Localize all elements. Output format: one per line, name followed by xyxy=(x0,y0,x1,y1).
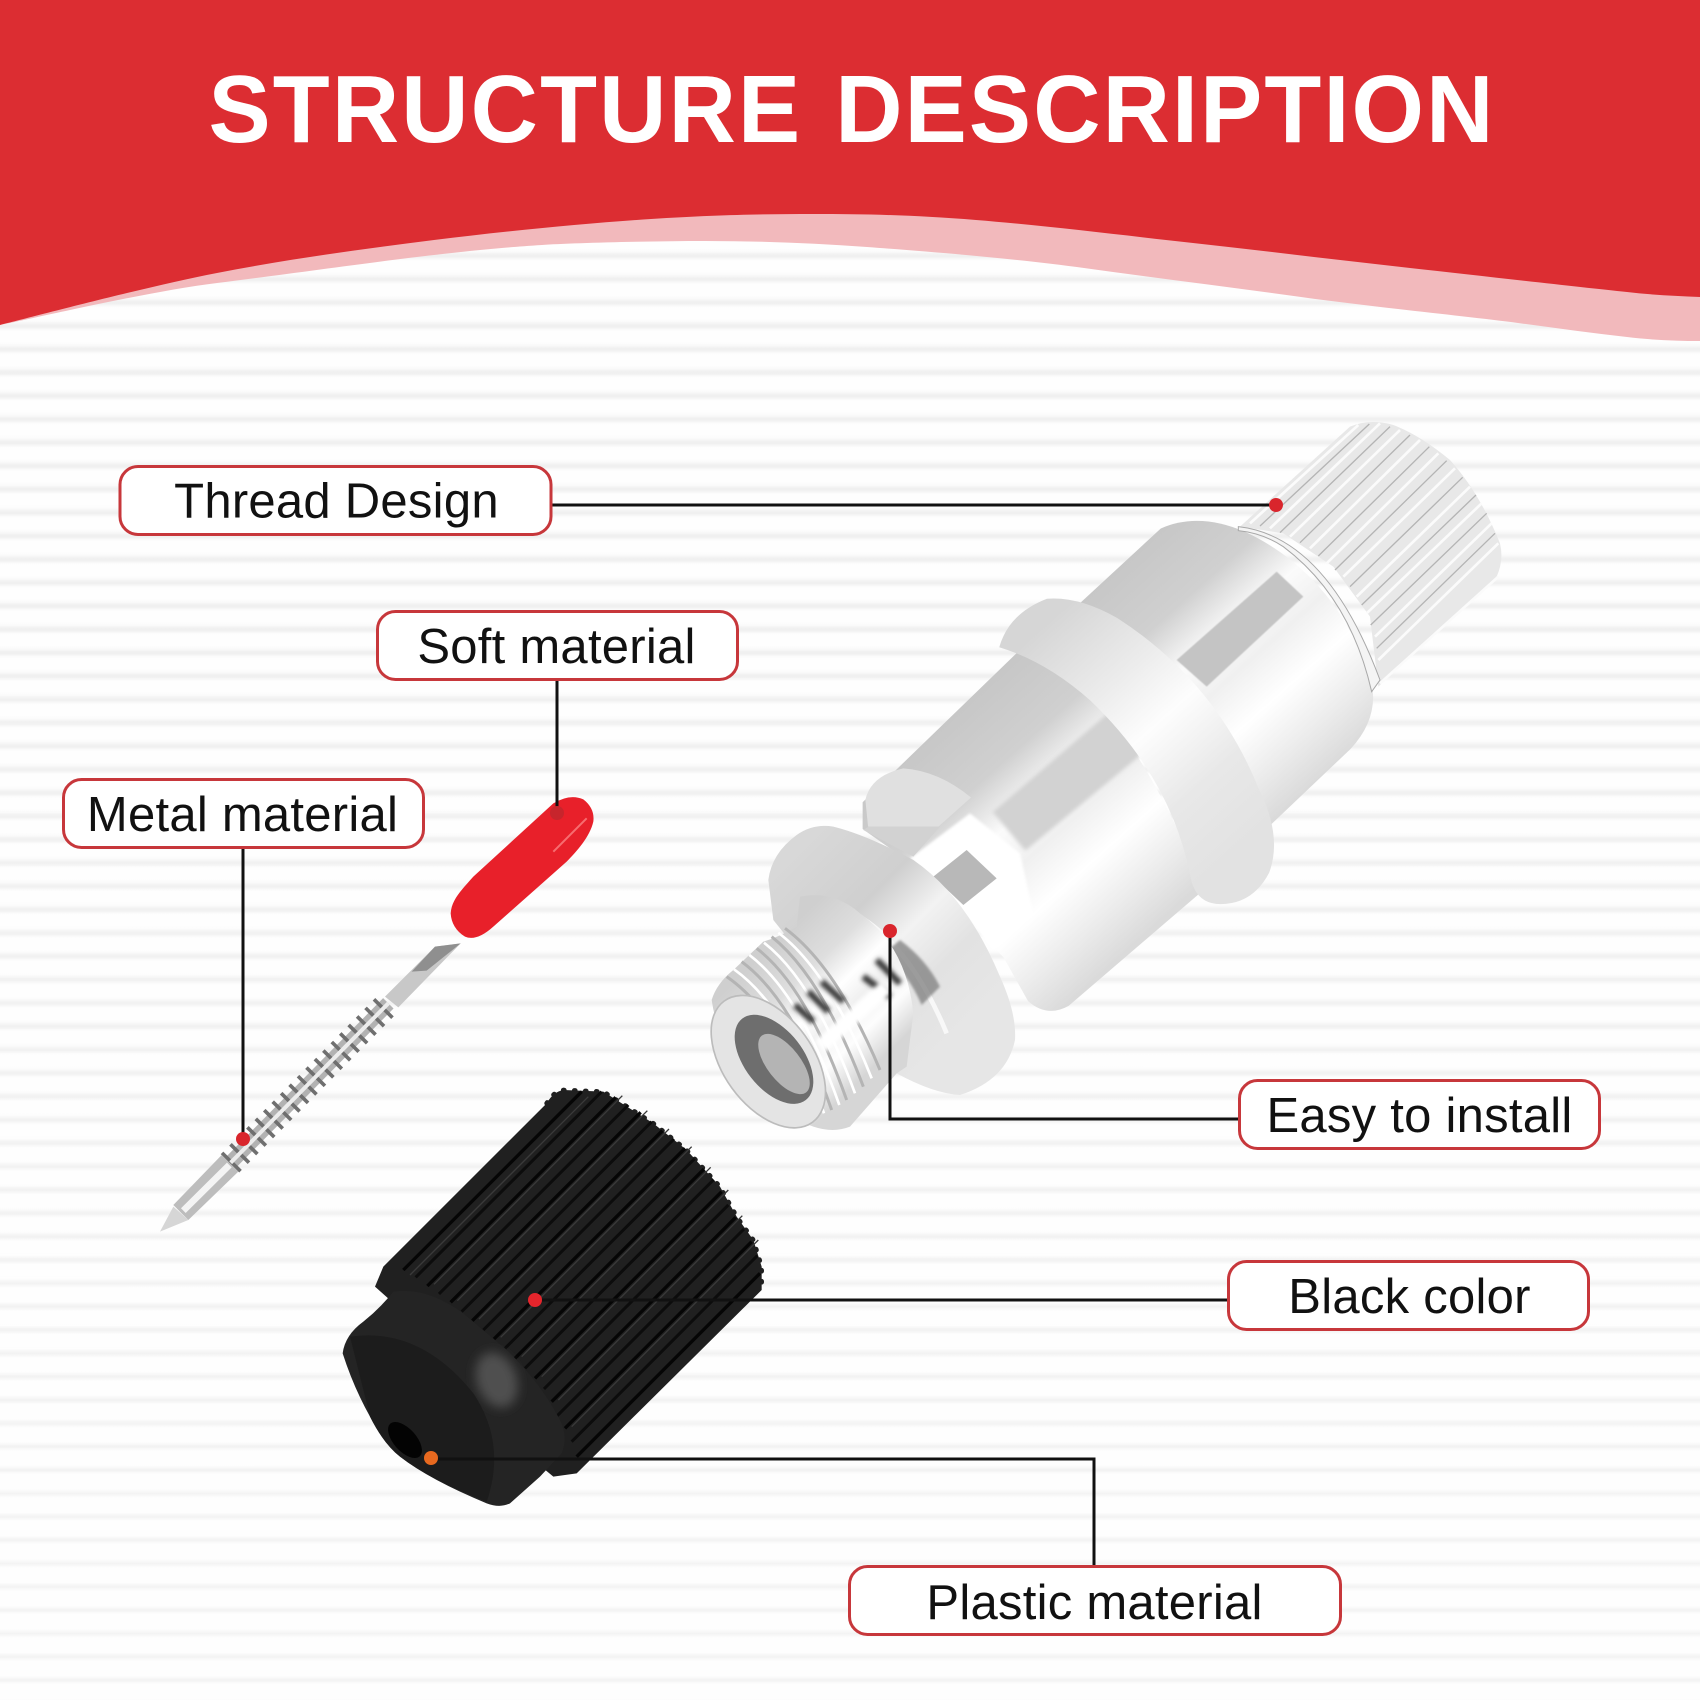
shank highlight xyxy=(183,1165,229,1211)
grey reflection: neck xyxy=(933,850,997,905)
callout: Thread Design xyxy=(120,466,1283,534)
metal holder body xyxy=(688,422,1501,1149)
knurled head xyxy=(1240,422,1501,687)
callout: Easy to install xyxy=(883,924,1600,1148)
middle flange xyxy=(999,598,1274,904)
point xyxy=(160,1207,188,1232)
threaded shaft xyxy=(230,1003,388,1163)
callout: Plastic material xyxy=(424,1451,1340,1634)
craft blade needle xyxy=(160,943,461,1232)
callout: Metal material: Metal material xyxy=(87,788,398,842)
red protective cap xyxy=(451,797,594,938)
knob scalloped end xyxy=(547,1090,762,1290)
threaded end face with bore xyxy=(688,975,849,1149)
callout: Black color: Black color xyxy=(1288,1270,1531,1324)
neck collar xyxy=(865,768,971,827)
grey reflection: lower barrel xyxy=(993,696,1172,851)
grey reflection: upper barrel xyxy=(1177,572,1303,687)
blade bevel xyxy=(412,943,461,972)
callout: Easy to install: Easy to install xyxy=(1266,1089,1573,1143)
callout: Plastic material: Plastic material xyxy=(926,1576,1263,1630)
knob ridges xyxy=(403,1092,760,1457)
cap bore xyxy=(382,1416,428,1464)
cap highlight xyxy=(468,1347,525,1413)
black knurled knob xyxy=(343,1090,762,1506)
neck and highlight band xyxy=(863,807,1033,950)
shank xyxy=(173,1155,238,1220)
upper barrel xyxy=(1079,521,1373,831)
callout: Metal material xyxy=(64,780,424,1146)
callout: Soft material: Soft material xyxy=(417,620,696,674)
knob front cap xyxy=(343,1291,565,1506)
header: red wave banner xyxy=(0,0,1700,325)
callout: Black color xyxy=(528,1262,1588,1330)
knob body xyxy=(375,1090,762,1477)
title: STRUCTURE DESCRIPTION xyxy=(208,56,1496,163)
lower barrel xyxy=(863,645,1204,1011)
threaded stem xyxy=(712,895,913,1130)
callout: Soft material xyxy=(378,612,738,820)
header: pale ribbon xyxy=(0,200,1700,341)
callout: Thread Design: Thread Design xyxy=(174,474,499,528)
knurl collar xyxy=(1238,527,1380,692)
blade tip xyxy=(385,943,461,1007)
cap face xyxy=(350,1335,494,1502)
end flange xyxy=(768,826,1015,1095)
